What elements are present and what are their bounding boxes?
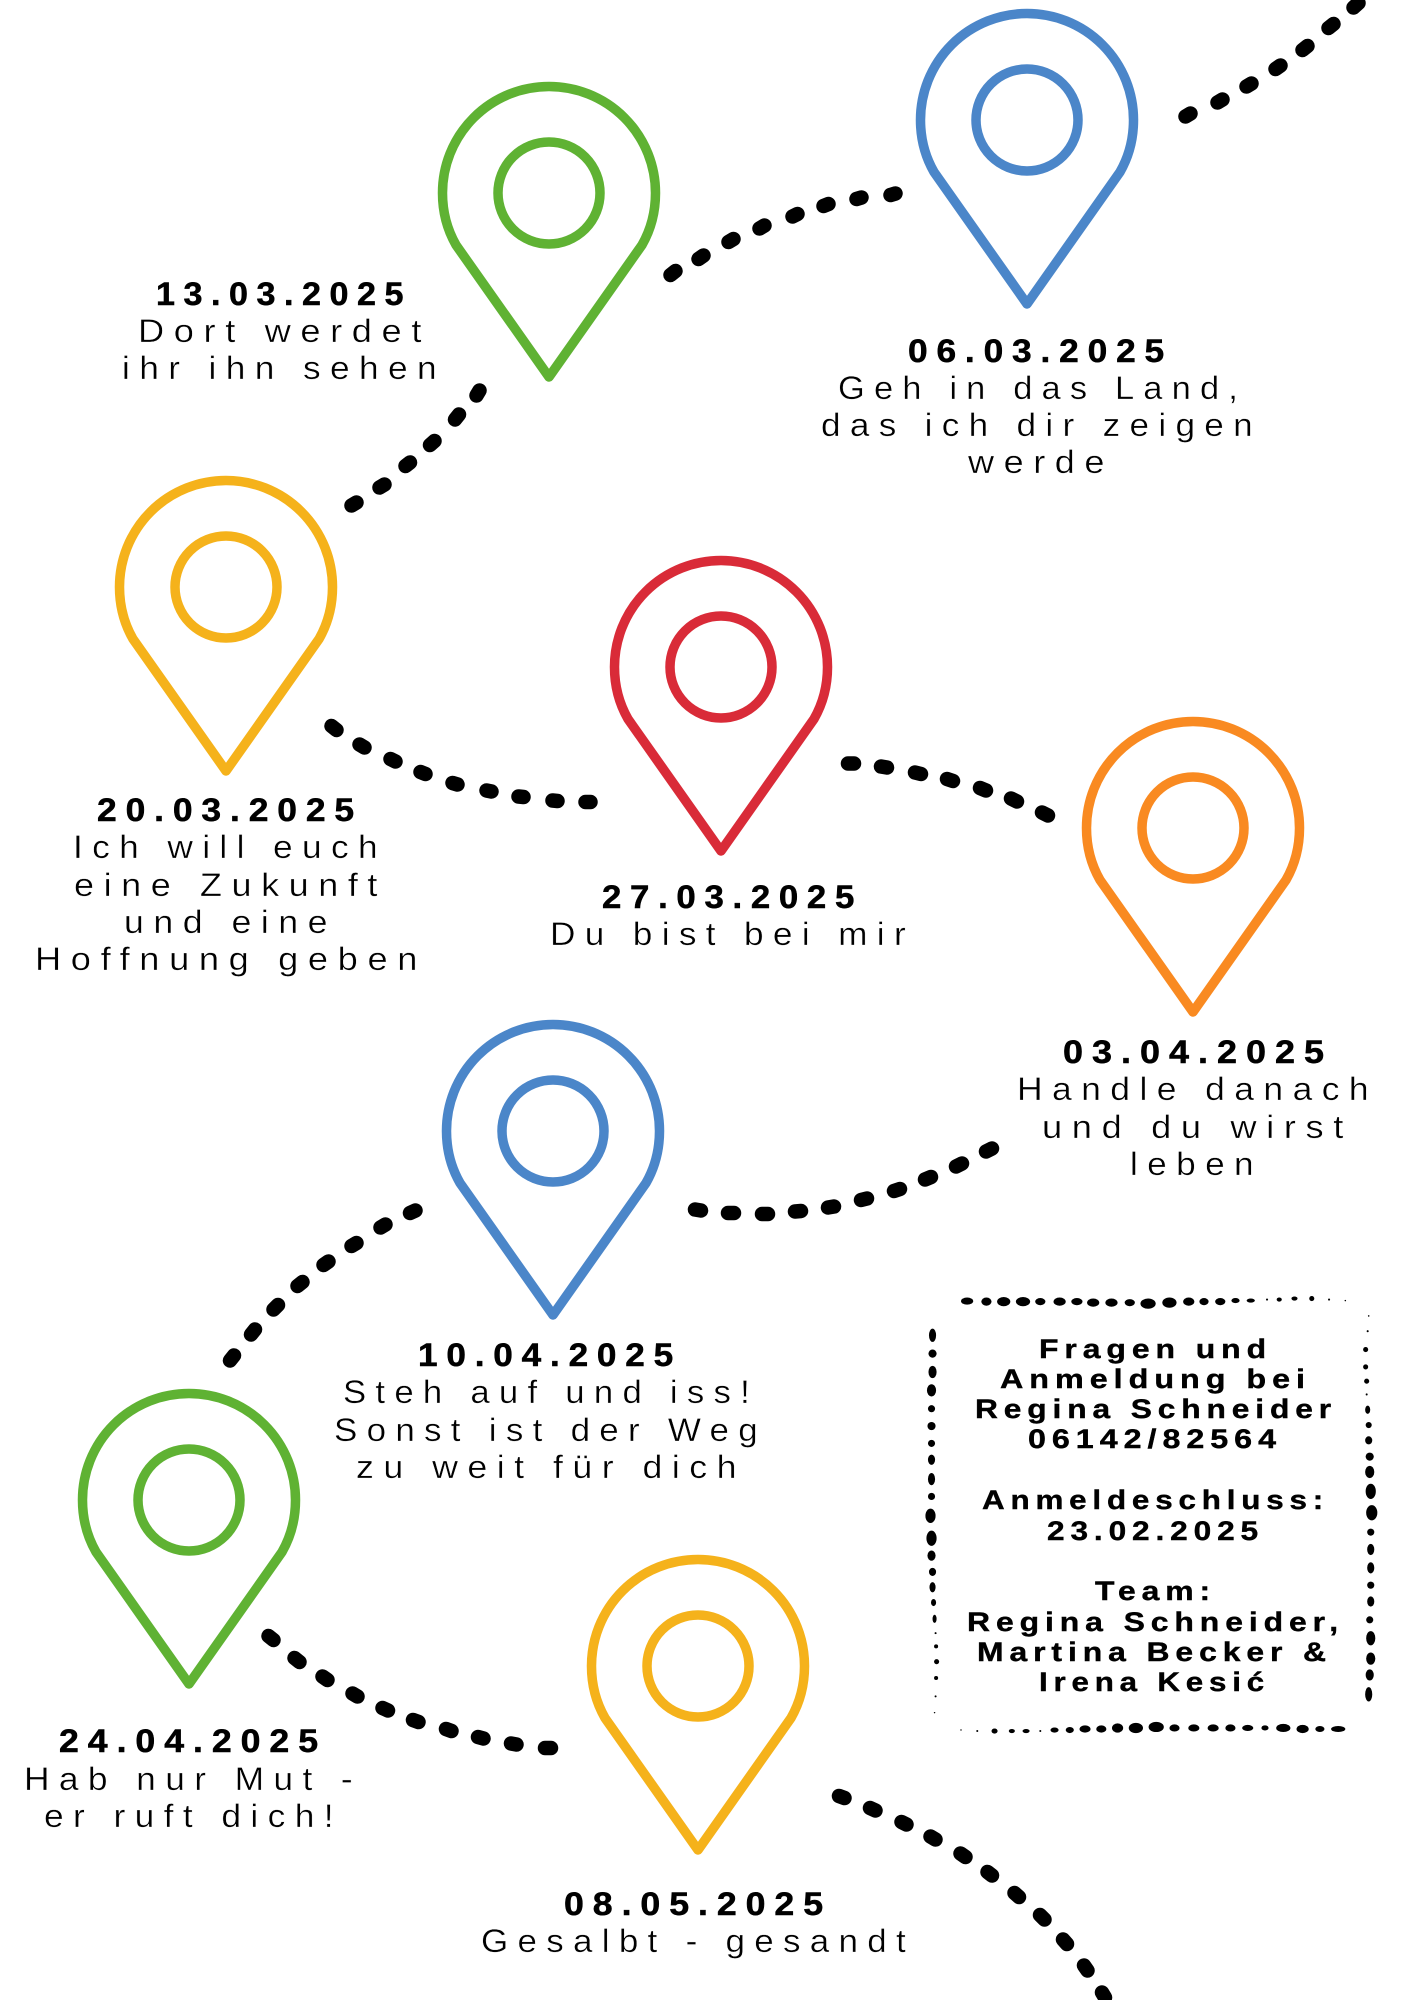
dotted box border bbox=[925, 1296, 1377, 1734]
text: 06.03.2025 bbox=[821, 333, 1262, 480]
text: 03.04.2025 bbox=[1017, 1034, 1378, 1182]
text: 03.04.2025: 03.04.2025 bbox=[1063, 1034, 1333, 1070]
pin: blue 10.04 bbox=[446, 1024, 660, 1315]
text: 13.03.2025: 13.03.2025 bbox=[156, 276, 412, 312]
text: 24.04.2025 bbox=[24, 1723, 362, 1834]
pin: green 13.03 bbox=[442, 86, 656, 377]
contact text: Regina Schneider bbox=[975, 1394, 1337, 1424]
text: 20.03.2025: 20.03.2025 bbox=[97, 792, 363, 828]
text: 20.03.2025: eine Zukunft bbox=[74, 867, 387, 903]
text: 13.03.2025: Dort werdet bbox=[138, 313, 431, 349]
text: 03.04.2025: Handle danach bbox=[1017, 1071, 1378, 1107]
dotted path: yellow pin to red pin bbox=[332, 726, 590, 802]
contact text: Irena Kesić bbox=[1039, 1667, 1270, 1697]
text: 24.04.2025: er ruft dich! bbox=[44, 1798, 343, 1834]
pin: yellow 08.05 bbox=[592, 1560, 804, 1850]
text: 06.03.2025: Geh in das Land, bbox=[838, 370, 1247, 406]
text: 03.04.2025: leben bbox=[1130, 1146, 1263, 1182]
dotted path: blue pin to green pin bbox=[230, 1210, 416, 1360]
dotted path: top right edge bbox=[1186, 3, 1358, 116]
pin: orange 03.04 bbox=[1086, 722, 1300, 1012]
text: 13.03.2025: ihr ihn sehen bbox=[122, 350, 446, 386]
text: 20.03.2025 bbox=[35, 792, 427, 977]
text: 06.03.2025: werde bbox=[967, 444, 1114, 480]
contact text: Regina Schneider, bbox=[967, 1607, 1344, 1637]
text: 10.04.2025: zu weit für dich bbox=[356, 1449, 746, 1485]
contact text: Fragen und bbox=[1039, 1334, 1272, 1364]
contact text: 23.02.2025 bbox=[1047, 1516, 1264, 1546]
text: 27.03.2025: Du bist bei mir bbox=[550, 916, 915, 952]
contact text: Team: bbox=[1095, 1576, 1216, 1606]
text: 03.04.2025: und du wirst bbox=[1042, 1109, 1353, 1145]
text: 20.03.2025: Hoffnung geben bbox=[35, 941, 427, 977]
text: 10.04.2025: Steh auf und iss! bbox=[343, 1374, 759, 1410]
callout: contact box bbox=[925, 1296, 1377, 1734]
dotted path: yellow pin to bottom edge bbox=[839, 1796, 1105, 1998]
text: 13.03.2025 bbox=[122, 276, 446, 386]
text: 08.05.2025: 08.05.2025 bbox=[564, 1886, 832, 1922]
dotted path: green pin to yellow pin bbox=[268, 1636, 551, 1748]
contact text: 06142/82564 bbox=[1028, 1424, 1282, 1454]
text: 08.05.2025 bbox=[481, 1886, 915, 1959]
contact text: Anmeldeschluss: bbox=[982, 1485, 1329, 1515]
text: 06.03.2025: 06.03.2025 bbox=[908, 333, 1173, 369]
text: 10.04.2025: Sonst ist der Weg bbox=[334, 1412, 767, 1448]
text: 08.05.2025: Gesalbt - gesandt bbox=[481, 1923, 915, 1959]
dotted path: yellow pin to green pin bbox=[352, 390, 480, 506]
contact text: Martina Becker & bbox=[977, 1637, 1332, 1667]
text: 24.04.2025: 24.04.2025 bbox=[59, 1723, 327, 1759]
pin: yellow 20.03 bbox=[120, 480, 332, 771]
contact text bbox=[967, 1334, 1344, 1697]
text: 27.03.2025: 27.03.2025 bbox=[602, 879, 863, 915]
text: 20.03.2025: Ich will euch bbox=[73, 829, 387, 865]
text: 10.04.2025 bbox=[334, 1337, 767, 1485]
contact text: Anmeldung bei bbox=[1000, 1364, 1311, 1394]
dotted path: red pin to orange pin bbox=[848, 764, 1048, 816]
text: 27.03.2025 bbox=[550, 879, 915, 952]
pin: red 27.03 bbox=[614, 560, 828, 851]
dotted path: green pin to blue pin bbox=[670, 194, 896, 275]
pin: green 24.04 bbox=[82, 1394, 296, 1684]
text: 06.03.2025: das ich dir zeigen bbox=[821, 407, 1262, 443]
dotted path: orange pin to blue pin bbox=[695, 1148, 992, 1214]
pin: blue 06.03 bbox=[920, 14, 1134, 304]
text: 20.03.2025: und eine bbox=[124, 904, 337, 940]
text: 10.04.2025: 10.04.2025 bbox=[418, 1337, 682, 1373]
text: 24.04.2025: Hab nur Mut - bbox=[24, 1761, 362, 1797]
